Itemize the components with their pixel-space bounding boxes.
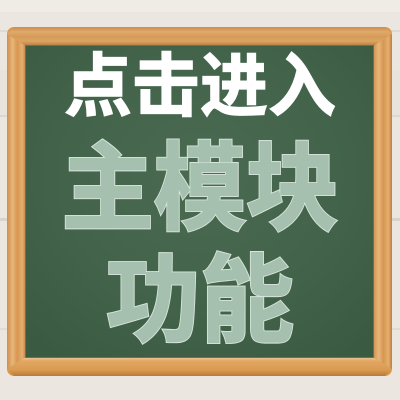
chalkboard panel bbox=[25, 45, 374, 358]
heading: 主模块: 主模块 bbox=[62, 136, 338, 243]
heading: 点击进入: 点击进入 bbox=[64, 48, 336, 125]
heading: 主模块: 主模块 bbox=[62, 136, 338, 243]
heading: 功能: 功能 bbox=[106, 248, 294, 355]
frame top rail bbox=[7, 27, 392, 46]
frame right rail bbox=[373, 34, 392, 369]
frame left rail bbox=[7, 34, 26, 369]
heading: 功能: 功能 bbox=[106, 248, 294, 355]
frame bottom rail bbox=[7, 357, 392, 376]
